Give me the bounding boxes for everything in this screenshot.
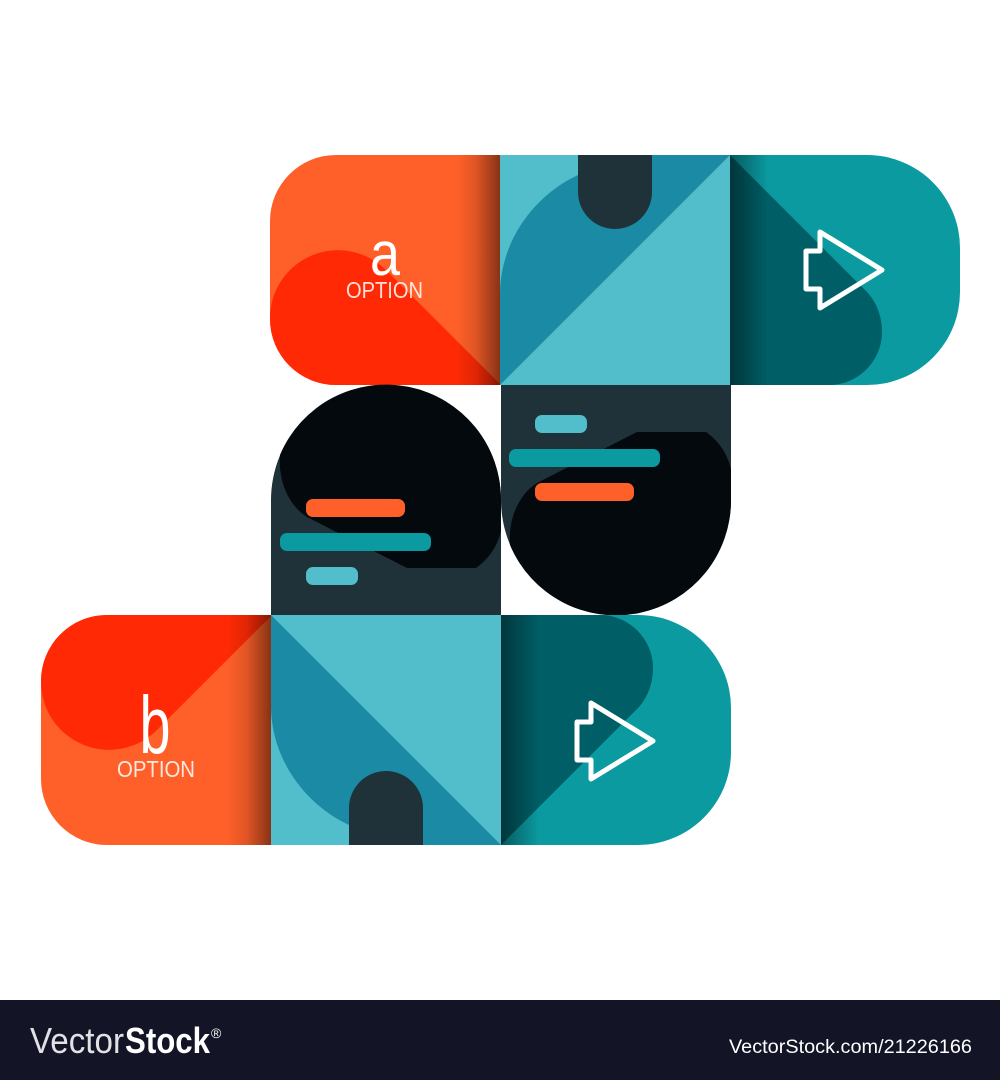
orange tile with red fold xyxy=(41,615,272,845)
footer band xyxy=(0,1000,1000,1080)
black fold xyxy=(510,432,731,615)
orange tile with red fold xyxy=(270,155,501,385)
bar: light blue xyxy=(306,567,358,585)
black fold xyxy=(280,385,501,568)
icon: arrow top right xyxy=(806,232,882,308)
light blue tile with teardrop fold xyxy=(271,615,501,845)
logo: VectorStock: Stock xyxy=(125,1020,211,1061)
label: a OPTION: a xyxy=(370,220,400,289)
icon: arrow bottom xyxy=(577,703,653,779)
teal arrow tile xyxy=(501,615,731,845)
label: a OPTION xyxy=(346,220,423,303)
panel: bottom row, option b xyxy=(41,615,731,845)
teal arrow tile xyxy=(730,155,960,385)
panel: middle right text card xyxy=(501,385,731,615)
bar: teal xyxy=(280,533,431,551)
label: a OPTION: OPTION xyxy=(346,277,423,303)
label: b OPTION xyxy=(117,680,195,782)
light blue tile with teardrop fold xyxy=(500,155,730,385)
panel: top row, option a xyxy=(270,155,960,385)
card background xyxy=(501,385,731,615)
bar: orange xyxy=(306,499,405,517)
logo: VectorStock: ® xyxy=(211,1025,222,1041)
card background xyxy=(271,385,501,615)
label: b OPTION: b xyxy=(140,680,170,771)
logo: VectorStock: Vector xyxy=(30,1020,124,1061)
logo: VectorStock xyxy=(30,1020,222,1061)
footer image id: VectorStock.com/21226166 xyxy=(729,1036,972,1058)
bar: light blue xyxy=(535,415,587,433)
bar: teal xyxy=(509,449,660,467)
panel: middle left text card xyxy=(271,385,501,615)
bar: orange xyxy=(535,483,634,501)
label: b OPTION: OPTION xyxy=(117,756,195,782)
